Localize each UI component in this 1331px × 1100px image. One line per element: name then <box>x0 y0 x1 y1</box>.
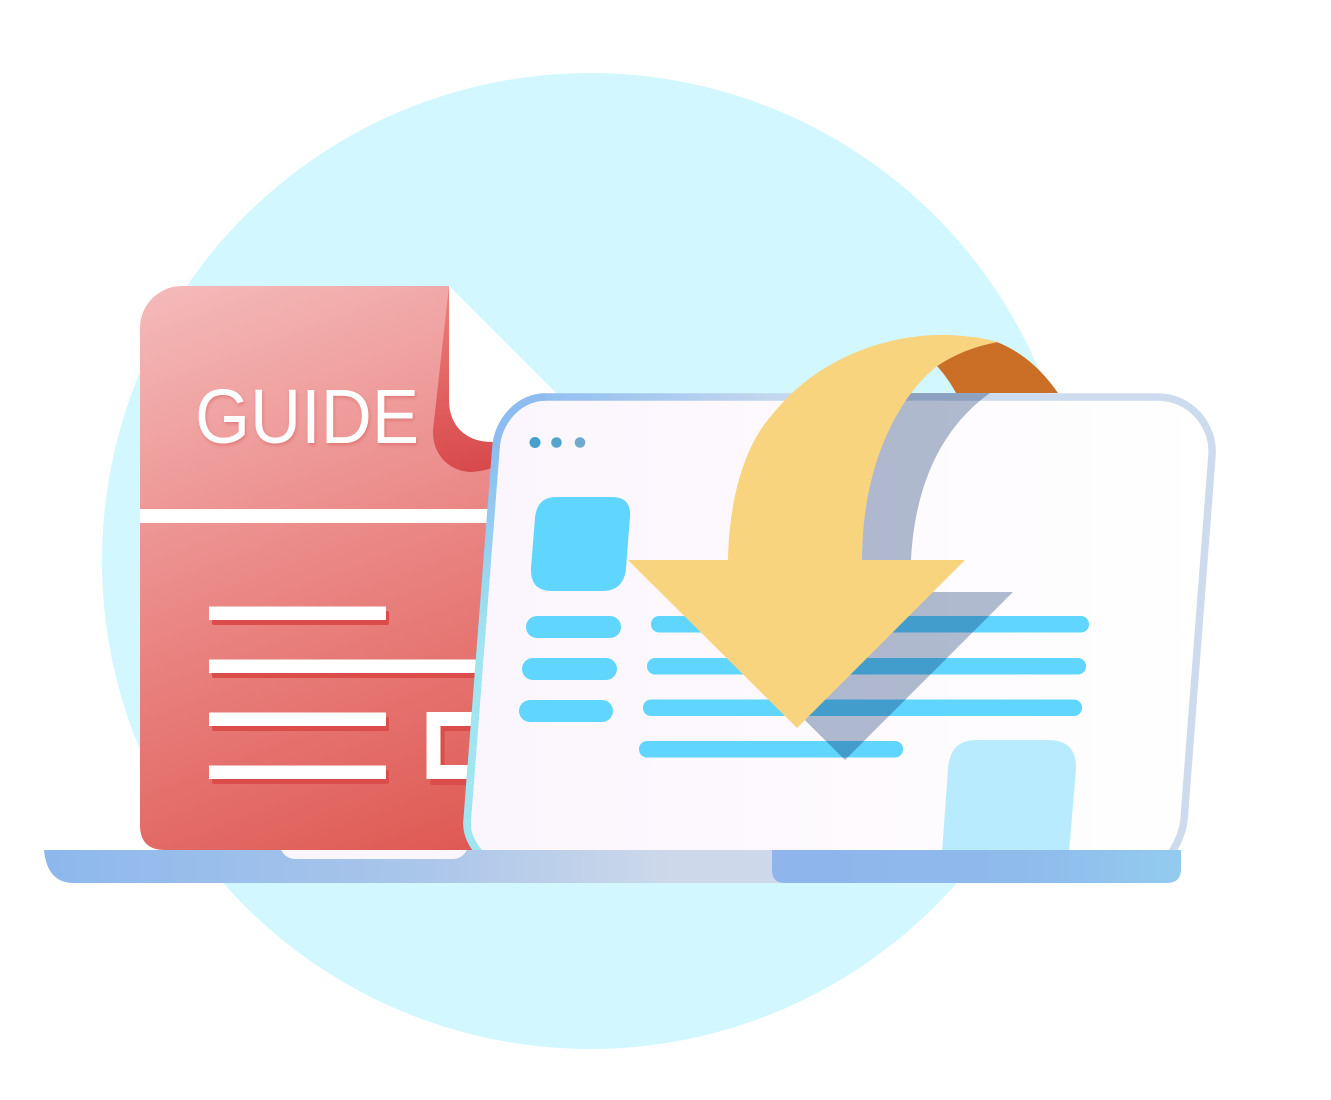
background circle <box>102 73 1078 1049</box>
base right <box>772 850 1181 883</box>
screen left border <box>467 397 545 858</box>
arrow body <box>628 335 998 728</box>
base notch <box>281 850 467 859</box>
blue square tile <box>531 497 630 591</box>
document body <box>140 286 530 850</box>
page fold inside white <box>449 286 562 446</box>
divider band <box>140 509 530 523</box>
laptop base <box>44 850 1181 883</box>
download arrow <box>628 335 1058 728</box>
window dots <box>530 437 585 448</box>
base left <box>44 850 790 883</box>
text lines <box>209 606 502 784</box>
document image frame <box>434 719 518 778</box>
screen panel <box>467 397 1212 858</box>
page fold red <box>433 286 505 472</box>
light tile <box>942 740 1076 852</box>
guide document <box>140 286 562 850</box>
arrow back flap <box>937 342 1058 393</box>
GUIDE title: GUIDE <box>195 374 419 460</box>
sidebar pills <box>519 616 621 722</box>
content lines <box>639 616 1089 758</box>
laptop screen <box>467 397 1212 858</box>
arrow shadow <box>676 393 1013 760</box>
